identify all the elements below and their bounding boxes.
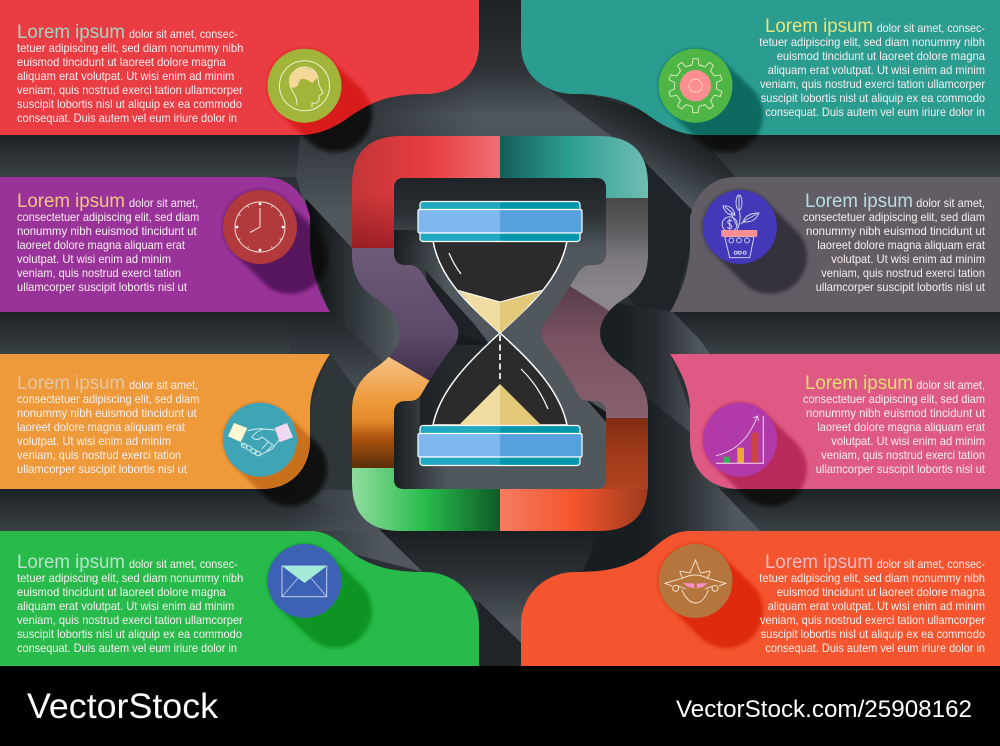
hourglass frame: [352, 136, 648, 531]
top sand: [458, 290, 542, 333]
icon: handshake: [223, 403, 297, 477]
text: orange: [17, 372, 199, 476]
panel: orange: [0, 354, 330, 489]
text: teal: euismod tincidunt ut laoreet dolore magna: [777, 49, 985, 63]
text: orange: consectetuer adipiscing elit, sed diam: [17, 392, 199, 406]
top cap: [418, 202, 582, 242]
text: gray: ullamcorper suscipit lobortis nisl ut: [816, 280, 986, 294]
text: purple: volutpat. Ut wisi enim ad minim: [17, 252, 171, 266]
text: pink: consectetuer adipiscing elit, sed diam: [803, 392, 985, 406]
text: green: dolor sit amet, consec-: [129, 557, 238, 571]
text: pink: ullamcorper suscipit lobortis nisl ut: [816, 462, 986, 476]
panel: teal: [521, 0, 1000, 135]
frame segment: orange: [352, 356, 430, 468]
text: orange: ullamcorper suscipit lobortis nisl ut: [17, 462, 188, 476]
text: orange-red: consequat. Duis autem vel eum iriure dolor in: [765, 641, 985, 655]
bottom glass bulb: [433, 333, 567, 425]
text: red: suscipit lobortis nisl ut aliquip ex ea commodo: [17, 97, 242, 111]
frame segment: purple: [352, 248, 458, 380]
text: teal: Lorem ipsum: [765, 15, 873, 37]
text: gray: dolor sit amet,: [916, 196, 985, 210]
panel: red: [0, 0, 479, 135]
text: orange-red: Lorem ipsum: [765, 551, 873, 573]
text: red: [17, 21, 243, 125]
icon: clock: [223, 190, 297, 264]
text: pink: nonummy nibh euismod tincidunt ut: [806, 406, 986, 420]
text: pink: laoreet dolore magna aliquam erat: [817, 420, 986, 434]
frame segment: green: [352, 468, 500, 531]
icon: plant in pot: [703, 190, 777, 264]
text: teal: dolor sit amet, consec-: [877, 21, 985, 35]
text: pink: veniam, quis nostrud exerci tation: [821, 448, 985, 462]
text: green: euismod tincidunt ut laoreet dolore magna: [17, 585, 226, 599]
text: green: suscipit lobortis nisl ut aliquip ex ea commodo: [17, 627, 242, 641]
hourglass: [418, 202, 582, 466]
frame segment: orange-red: [500, 489, 648, 531]
text: purple: laoreet dolore magna aliquam erat: [17, 238, 186, 252]
text: gray: veniam, quis nostrud exerci tation: [821, 266, 985, 280]
frame segment: gray: [570, 198, 648, 311]
text: pink: dolor sit amet,: [916, 378, 985, 392]
text: orange: Lorem ipsum: [17, 372, 125, 394]
footer band: [0, 666, 1000, 746]
brand name: VectorStock: [27, 687, 219, 726]
text: red: euismod tincidunt ut laoreet dolore magna: [17, 55, 226, 69]
panel: pink: [670, 354, 1000, 489]
text: orange-red: suscipit lobortis nisl ut aliquip ex ea commodo: [761, 627, 985, 641]
panel: orange-red: [521, 531, 1000, 666]
bottom sand: [459, 384, 541, 425]
text: gray: Lorem ipsum: [805, 190, 913, 212]
text: gray: laoreet dolore magna aliquam erat: [817, 238, 986, 252]
text: teal: [759, 15, 985, 119]
hourglass backing shape: [390, 175, 610, 493]
frame segment: teal: [500, 136, 648, 198]
bottom cap: [418, 426, 582, 466]
text: gray: nonummy nibh euismod tincidunt ut: [806, 224, 986, 238]
text: orange: dolor sit amet,: [129, 378, 198, 392]
text: orange-red: [759, 551, 985, 655]
text: gray: [803, 190, 986, 294]
text: red: veniam, quis nostrud exerci tation ullamcorper: [17, 83, 243, 97]
text: orange-red: aliquam erat volutpat. Ut wisi enim ad minim: [768, 599, 985, 613]
text: orange: nonummy nibh euismod tincidunt ut: [17, 406, 197, 420]
icon: airplane: [658, 544, 732, 618]
text: red: aliquam erat volutpat. Ut wisi enim ad minim: [17, 69, 234, 83]
text: red: Lorem ipsum: [17, 21, 125, 43]
text: purple: [17, 190, 199, 294]
icon: growth chart: [703, 403, 777, 477]
panel: gray: [670, 177, 1000, 312]
text: purple: nonummy nibh euismod tincidunt ut: [17, 224, 197, 238]
text: teal: tetuer adipiscing elit, sed diam nonummy nibh: [759, 35, 985, 49]
panel: purple: [0, 177, 330, 312]
text: purple: dolor sit amet,: [129, 196, 198, 210]
frame segment: red: [352, 136, 500, 248]
frame segment: mauve: [542, 286, 648, 418]
icon: gear: [658, 49, 732, 123]
long shadows on background: [260, 86, 770, 469]
text: green: aliquam erat volutpat. Ut wisi enim ad minim: [17, 599, 234, 613]
image url: VectorStock.com/25908162: [676, 696, 972, 723]
text: green: Lorem ipsum: [17, 551, 125, 573]
panel: green: [0, 531, 479, 666]
top glass bulb: [433, 241, 567, 333]
icon: envelope: [268, 544, 342, 618]
text: teal: suscipit lobortis nisl ut aliquip ex ea commodo: [761, 91, 985, 105]
text: purple: veniam, quis nostrud exerci tation: [17, 266, 181, 280]
text: purple: ullamcorper suscipit lobortis nisl ut: [17, 280, 188, 294]
text: orange: veniam, quis nostrud exerci tation: [17, 448, 181, 462]
glass highlights: [449, 253, 548, 409]
falling sand: [499, 335, 501, 382]
text: pink: volutpat. Ut wisi enim ad minim: [831, 434, 985, 448]
frame segment: brown: [596, 418, 648, 489]
text: green: tetuer adipiscing elit, sed diam nonummy nibh: [17, 571, 243, 585]
text: orange-red: veniam, quis nostrud exerci tation ullamcorper: [760, 613, 985, 627]
text: orange-red: dolor sit amet, consec-: [877, 557, 985, 571]
text: orange: laoreet dolore magna aliquam erat: [17, 420, 186, 434]
text: green: veniam, quis nostrud exerci tation ullamcorper: [17, 613, 243, 627]
text: orange: volutpat. Ut wisi enim ad minim: [17, 434, 171, 448]
text: teal: consequat. Duis autem vel eum iriure dolor in: [765, 105, 985, 119]
text: green: consequat. Duis autem vel eum iriure dolor in: [17, 641, 237, 655]
text: green: [17, 551, 243, 655]
text: purple: consectetuer adipiscing elit, sed diam: [17, 210, 199, 224]
text: red: tetuer adipiscing elit, sed diam nonummy nibh: [17, 41, 243, 55]
text: red: consequat. Duis autem vel eum iriure dolor in: [17, 111, 237, 125]
text: red: dolor sit amet, consec-: [129, 27, 238, 41]
text: pink: Lorem ipsum: [805, 372, 913, 394]
text: purple: Lorem ipsum: [17, 190, 125, 212]
icon: brain in head: [268, 49, 342, 123]
text: orange-red: euismod tincidunt ut laoreet dolore magna: [777, 585, 985, 599]
text: orange-red: tetuer adipiscing elit, sed diam nonummy nibh: [759, 571, 985, 585]
text: teal: veniam, quis nostrud exerci tation ullamcorper: [760, 77, 985, 91]
text: teal: aliquam erat volutpat. Ut wisi enim ad minim: [768, 63, 985, 77]
text: gray: volutpat. Ut wisi enim ad minim: [831, 252, 985, 266]
text: gray: consectetuer adipiscing elit, sed diam: [803, 210, 985, 224]
text: pink: [803, 372, 986, 476]
